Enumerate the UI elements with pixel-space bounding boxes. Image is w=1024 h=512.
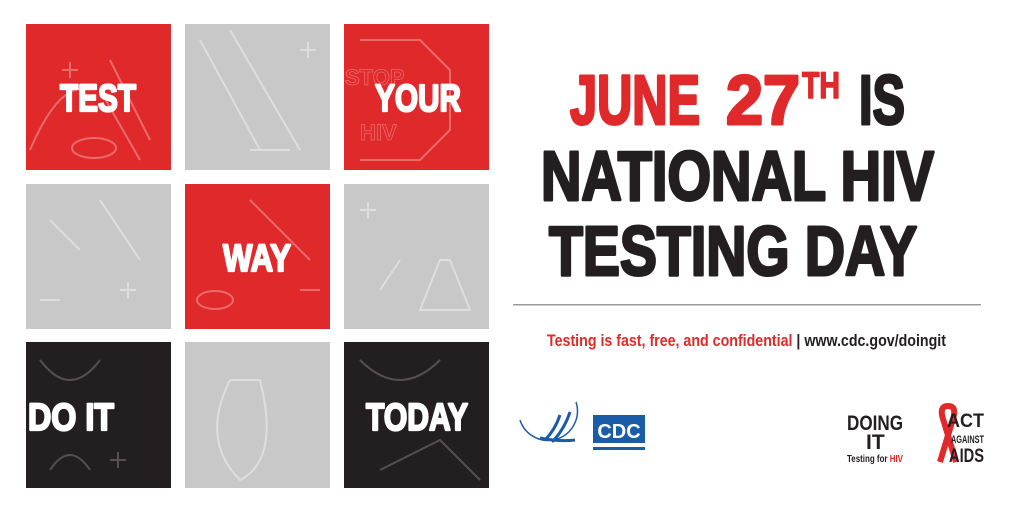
logo: HHS	[520, 402, 577, 442]
title: NATIONAL HIV	[541, 137, 934, 215]
tile: gray 1	[185, 24, 330, 170]
logo: Doing It: IT	[866, 431, 885, 454]
tagline: Testing is fast, free, and confidential | www.cdc.gov/doingit	[547, 331, 946, 350]
title: JUNE	[570, 61, 700, 139]
title: TH	[802, 65, 840, 106]
tile: WAY	[185, 184, 330, 329]
tile: gray 3	[344, 184, 489, 329]
logo: CDC	[593, 415, 645, 450]
logo: Act Against AIDS	[940, 406, 984, 467]
tile: DO IT: DO IT	[28, 397, 114, 439]
title	[541, 61, 934, 290]
title: TESTING DAY	[549, 212, 917, 290]
tile grid	[26, 24, 489, 488]
tile: YOUR: STOP	[345, 65, 405, 90]
title: 27	[726, 61, 800, 139]
tile: TEST: TEST	[60, 78, 136, 120]
tile: gray 2	[26, 184, 171, 329]
logo: Act Against AIDS: ACT	[947, 411, 984, 432]
tile: YOUR: HIV	[360, 120, 397, 145]
tile: WAY: WAY	[223, 238, 291, 280]
tile: TEST	[26, 24, 171, 170]
logo: Act Against AIDS: AGAINST	[951, 434, 984, 446]
tile: YOUR: YOUR	[375, 78, 461, 120]
tile: TODAY	[344, 342, 489, 488]
tile: TODAY: TODAY	[366, 397, 468, 439]
title: IS	[859, 61, 905, 139]
logo: Doing It	[847, 412, 903, 465]
tile: gray 4	[185, 342, 330, 488]
tile: DO IT	[26, 342, 171, 488]
tile: YOUR	[344, 24, 489, 170]
logo: Doing It: DOING	[847, 412, 903, 435]
logo: Doing It: Testing for HIV	[847, 454, 903, 465]
logo: CDC: CDC	[597, 421, 641, 443]
logo: Act Against AIDS: AIDS	[949, 446, 984, 467]
